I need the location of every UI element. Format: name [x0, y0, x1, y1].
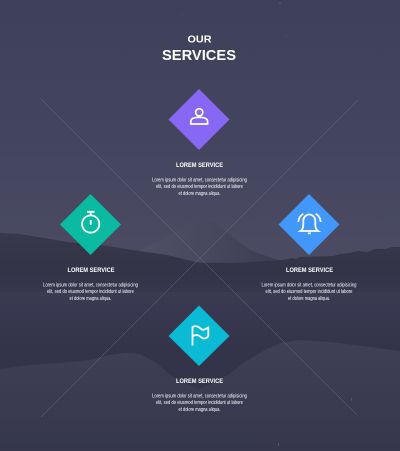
- icon diamond: cyan: [168, 306, 230, 366]
- label: LOREM SERVICE: [176, 379, 223, 385]
- description: elit, sed do eiusmod tempor incididunt ut labore: [266, 289, 353, 295]
- description: Lorem ipsum dolor sit amet, consectetur adipisicing: [152, 394, 247, 400]
- description: et dolore magna aliqua.: [178, 191, 220, 197]
- icon: stopwatch: [82, 212, 99, 233]
- description: et dolore magna aliqua.: [70, 296, 112, 302]
- description: elit, sed do eiusmod tempor incididunt ut labore: [156, 400, 243, 406]
- description: elit, sed do eiusmod tempor incididunt ut labore: [47, 289, 134, 295]
- icon: flag: [192, 326, 208, 346]
- service: right: [262, 194, 357, 302]
- icon diamond: blue: [278, 194, 340, 255]
- icon diamond: purple: [168, 89, 230, 150]
- description: Lorem ipsum dolor sit amet, consectetur adipisicing: [262, 282, 357, 288]
- icon: person: [191, 109, 208, 124]
- title: SERVICES: [162, 48, 236, 64]
- description: [43, 282, 138, 302]
- service: left: [43, 194, 138, 302]
- description: Lorem ipsum dolor sit amet, consectetur adipisicing: [43, 282, 138, 288]
- title: OUR: [188, 34, 212, 46]
- icon diamond: green: [60, 194, 121, 255]
- label: LOREM SERVICE: [68, 268, 114, 274]
- description: et dolore magna aliqua.: [178, 407, 220, 413]
- service: bottom: [152, 306, 247, 413]
- title: [162, 34, 236, 64]
- description: et dolore magna aliqua.: [288, 296, 330, 302]
- description: [152, 394, 247, 413]
- description: Lorem ipsum dolor sit amet, consectetur adipisicing: [152, 177, 247, 183]
- label: LOREM SERVICE: [286, 268, 333, 274]
- icon: bell: [298, 214, 321, 233]
- service: top: [152, 89, 247, 197]
- description: elit, sed do eiusmod tempor incididunt ut labore: [156, 184, 243, 190]
- label: LOREM SERVICE: [176, 163, 223, 169]
- description: [152, 177, 247, 197]
- description: [262, 282, 357, 302]
- crossing diagonal lines: [41, 99, 358, 417]
